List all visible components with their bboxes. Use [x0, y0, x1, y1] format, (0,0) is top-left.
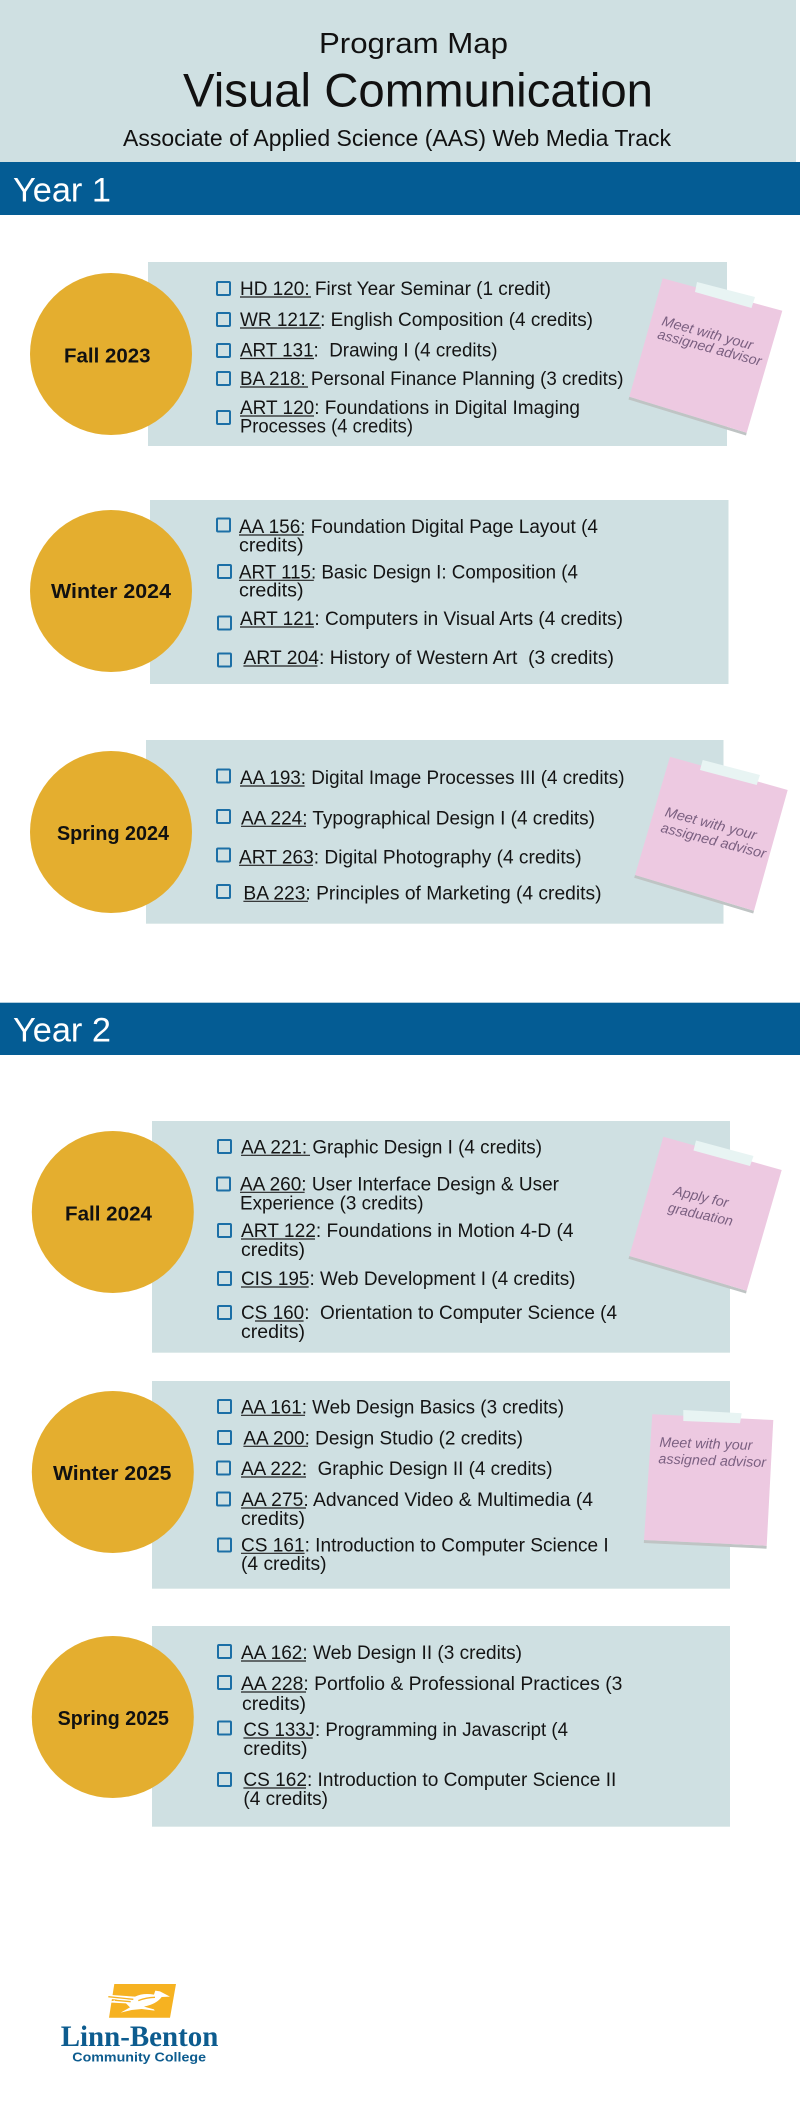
course: AA 275: AA 275: Advanced Video & Multimedia (4	[241, 1490, 593, 1511]
course: AA 222: AA 222: Graphic Design II (4 credits)	[241, 1459, 552, 1480]
term circle: winter 2024: Winter 2024	[51, 581, 172, 603]
course: AA 162: AA 162: Web Design II (3 credits)	[241, 1643, 522, 1664]
panel: spring 2025	[32, 1626, 730, 1827]
title: visual communication: Visual Communication	[183, 64, 653, 116]
course: BA 218: BA 218: Personal Finance Planning (3 credits)	[240, 369, 624, 390]
sticky note: apply for graduation: Apply for	[671, 1182, 732, 1211]
subtitle: Associate of Applied Science (AAS) Web Media Track	[123, 125, 671, 151]
course: AA 221: AA 221: Graphic Design I (4 credits)	[241, 1137, 542, 1158]
course: ART 120: Processes (4 credits)	[240, 416, 413, 438]
course: CS 133J: CS 133J: Programming in Javascript (4	[243, 1720, 568, 1741]
course: AA 156: AA 156: Foundation Digital Page Layout (4	[239, 517, 598, 538]
term circle: spring 2025: Spring 2025	[58, 1708, 169, 1730]
course: ART 122	[218, 1221, 574, 1261]
course: AA 161: AA 161: Web Design Basics (3 credits)	[241, 1397, 564, 1418]
term circle: winter 2025: Winter 2025	[53, 1463, 171, 1485]
course: CIS 195: CIS 195: Web Development I (4 credits)	[241, 1269, 576, 1290]
course: AA 260	[217, 1174, 560, 1214]
course: CS 160: credits)	[241, 1322, 305, 1343]
course: WR 121Z: WR 121Z: English Composition (4 credits)	[240, 310, 593, 331]
course: CS 161: CS 161: Introduction to Computer Science I	[241, 1535, 609, 1556]
course: AA 228	[218, 1674, 622, 1715]
course: CS 133J	[218, 1720, 568, 1760]
term circle: fall 2024	[32, 1131, 194, 1293]
year 2 banner: Year 2	[13, 1012, 111, 1050]
term circle: fall 2024: Fall 2024	[65, 1204, 153, 1226]
panel: spring 2024	[30, 740, 788, 924]
course: ART 263: ART 263: Digital Photography (4 credits)	[239, 847, 582, 868]
sticky note: meet with advisor: Meet with your	[664, 803, 760, 843]
course: CS 161	[218, 1535, 609, 1575]
course: CS 162	[218, 1770, 616, 1810]
course: AA 275: credits)	[241, 1509, 305, 1530]
course: CS 162: CS 162: Introduction to Computer Science II	[243, 1770, 616, 1791]
term circle: spring 2025	[32, 1636, 194, 1798]
sticky note: meet with advisor: Meet with your	[660, 312, 756, 353]
course: ART 204: ART 204: History of Western Art (3 credits)	[243, 648, 614, 669]
course: ART 115: ART 115: Basic Design I: Composition (4	[239, 562, 578, 583]
course: AA 260: AA 260: User Interface Design & User	[240, 1174, 560, 1195]
header panel	[0, 0, 796, 162]
panel: fall 2023	[30, 262, 782, 446]
term circle: fall 2023	[30, 273, 192, 435]
course: HD 120: HD 120: First Year Seminar (1 credit)	[240, 279, 551, 300]
year 1 banner	[0, 162, 800, 215]
course: ART 120: ART 120: Foundations in Digital Imaging	[240, 398, 580, 419]
sticky note: meet with advisor: Meet with your	[659, 1434, 754, 1453]
course: ART 115: credits)	[239, 581, 304, 602]
term circle: fall 2023: Fall 2023	[64, 346, 150, 368]
course: AA 200: AA 200: Design Studio (2 credits)	[243, 1428, 523, 1449]
course: CS 162: (4 credits)	[243, 1789, 328, 1810]
sticky note: apply for graduation: graduation	[667, 1199, 735, 1229]
course: AA 228: credits)	[242, 1694, 306, 1715]
sticky note: meet with advisor	[644, 1410, 773, 1549]
course: AA 228: AA 228: Portfolio & Professional Practices (3	[241, 1674, 622, 1695]
title: program map: Program Map	[319, 28, 508, 60]
term circle: winter 2025	[32, 1391, 194, 1553]
course: ART 121: ART 121: Computers in Visual Arts (4 credits)	[240, 609, 623, 630]
year 1 banner: Year 1	[13, 172, 111, 210]
sticky note: meet with advisor: assigned advisor	[658, 1450, 768, 1470]
sticky note: apply for graduation	[628, 1137, 782, 1294]
panel: winter 2025	[32, 1381, 773, 1589]
course: AA 260: Experience (3 credits)	[240, 1193, 424, 1214]
course: ART 131: ART 131: Drawing I (4 credits)	[240, 340, 498, 362]
course: CS 160	[218, 1303, 617, 1343]
panel: winter 2024	[30, 500, 728, 684]
sticky note: meet with advisor	[634, 757, 788, 914]
sticky note: meet with advisor	[628, 278, 782, 436]
sticky note: meet with advisor: assigned advisor	[659, 819, 769, 862]
course: ART 120	[217, 398, 580, 438]
course: ART 122: credits)	[241, 1240, 305, 1261]
term circle: spring 2024: Spring 2024	[57, 823, 170, 845]
course: AA 156	[217, 517, 598, 556]
course: CS 160: CS 160: Orientation to Computer Science (4	[241, 1303, 617, 1324]
term circle: spring 2024	[30, 751, 192, 913]
course: BA 223: BA 223: Principles of Marketing (4 credits)	[243, 883, 602, 904]
wordmark: Linn-Benton: Linn-Benton	[61, 2020, 219, 2053]
icon: roadrunner badge	[103, 1984, 176, 2018]
term circle: winter 2024	[30, 510, 192, 672]
logo: Linn-Benton Community College	[61, 1984, 219, 2065]
wordmark: Community College: Community College	[72, 2050, 206, 2065]
course: ART 115	[218, 562, 578, 602]
course: ART 122: ART 122: Foundations in Motion 4-D (4	[241, 1221, 574, 1242]
course: AA 275	[217, 1490, 593, 1530]
sticky note: meet with advisor: assigned advisor	[656, 326, 765, 369]
course: AA 193: AA 193: Digital Image Processes III (4 credits)	[240, 768, 624, 789]
course: AA 156: credits)	[239, 536, 304, 556]
year 2 banner	[0, 1003, 800, 1055]
course: CS 133J: credits)	[243, 1739, 308, 1760]
course: CS 161: (4 credits)	[241, 1554, 326, 1575]
panel: fall 2024	[32, 1121, 782, 1353]
course: AA 224: AA 224: Typographical Design I (4 credits)	[241, 808, 595, 829]
